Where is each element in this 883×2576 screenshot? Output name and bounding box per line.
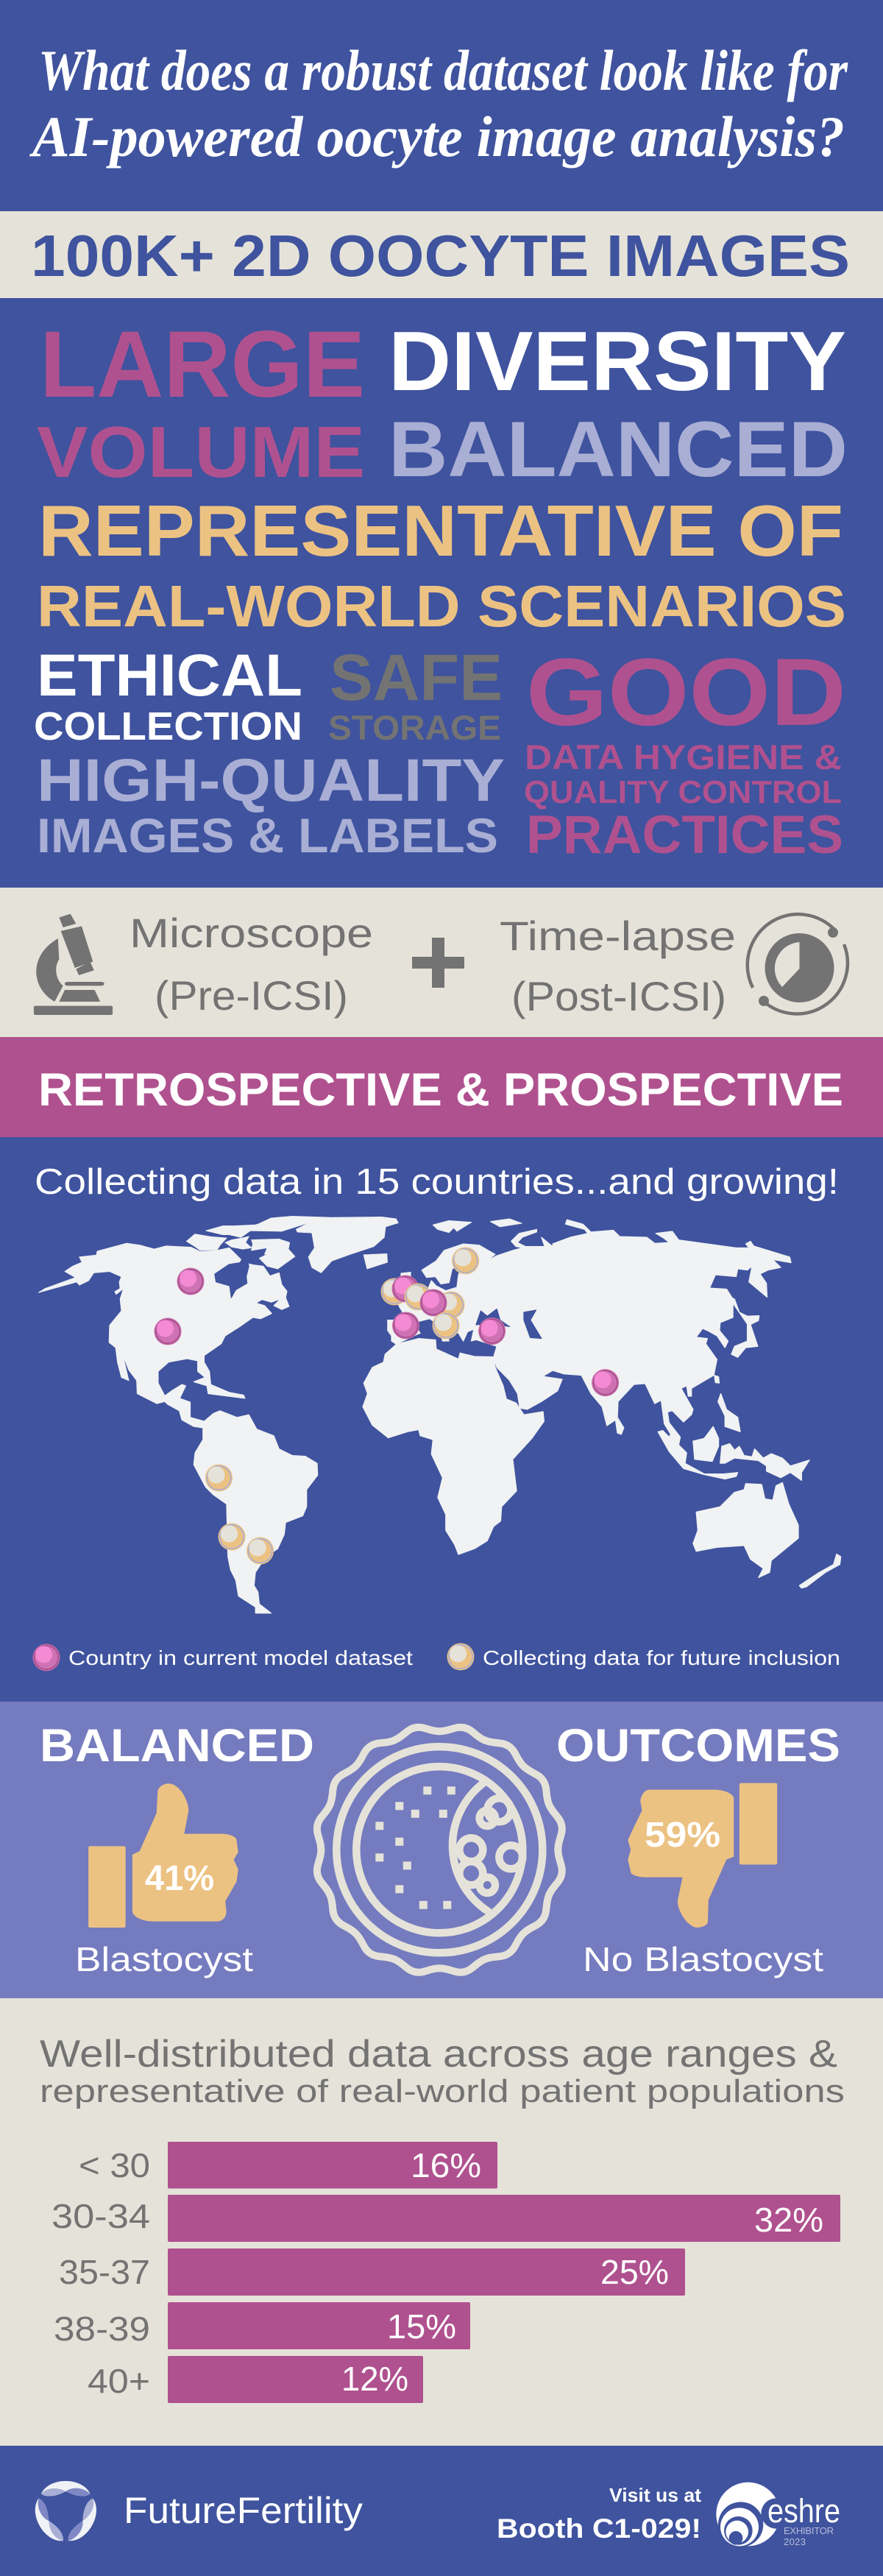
word: good data hygiene: PRACTICES [526,805,843,865]
word: good data hygiene: GOOD [526,638,846,746]
heading: balanced outcomes: OUTCOMES [556,1720,840,1772]
word: large volume [37,312,365,492]
legend: map: Country in current model dataset [68,1646,413,1669]
label: time-lapse: Time-lapse [500,913,736,959]
map: eurasia africa australia [363,1219,841,1588]
word: high quality: HIGH-QUALITY [37,747,505,814]
word: large volume: LARGE [40,312,365,417]
logo: eshre: eshre [767,2492,840,2530]
text: visit us [497,2484,701,2544]
word: ethical collection: ETHICAL [37,643,302,709]
bar: 38-39: 38-39 [54,2310,150,2348]
heading: age distribution: Well-distributed data across age ranges & [40,2033,837,2076]
icon: plus [412,938,464,988]
word: high quality: IMAGES & LABELS [37,808,498,863]
label: microscope: Microscope [130,910,373,956]
icon: thumbs up [88,1783,238,1928]
heading: age distribution: representative of real-world patient populations [40,2073,845,2109]
panel: image sources [34,910,848,1019]
footer [27,2481,840,2547]
bar: 38-39: 15% [387,2307,456,2346]
bar: under 30 [79,2142,497,2189]
logo: eshre: 2023 [784,2536,806,2547]
label: blastocyst: Blastocyst [75,1940,253,1978]
heading: balanced outcomes [40,1720,840,1772]
text: visit us: Visit us at [609,2484,701,2506]
legend: map [32,1643,840,1671]
label: microscope [130,910,373,1019]
word: balanced: BALANCED [389,405,848,493]
value: 59%: 59% [645,1816,720,1855]
map: americas [38,1216,398,1613]
word: good data hygiene: DATA HYGIENE & [525,737,842,776]
icon: oocyte [309,1719,570,1981]
bar: 40+ [88,2356,423,2403]
title: AI-powered oocyte image analysis? [29,105,845,169]
word: safe storage: SAFE [330,640,503,714]
word: large volume: VOLUME [37,411,365,492]
word: high quality [37,747,505,863]
label: time-lapse [500,913,736,1019]
word: safe storage [328,640,503,747]
heading: collecting data: Collecting data in 15 countries...and growing! [35,1162,839,1202]
bar: under 30: < 30 [79,2146,150,2184]
panel: balanced outcomes [40,1719,840,1981]
logo: eshre: EXHIBITOR [784,2525,834,2536]
heading: retrospective and prospective: RETROSPECTIVE & PROSPECTIVE [38,1064,843,1116]
word: representative: REAL-WORLD SCENARIOS [37,573,846,639]
word: good data hygiene: QUALITY CONTROL [524,774,842,810]
heading: age distribution [40,2033,845,2109]
bar: 38-39 [54,2302,470,2349]
bar: 30-34 [52,2195,840,2242]
bar: 30-34: 32% [754,2201,823,2239]
word: ethical collection: COLLECTION [34,704,302,749]
word: ethical collection [34,643,302,749]
icon: thumbs down [628,1783,777,1928]
logo: future fertility wordmark: FutureFertility [124,2490,363,2531]
word: safe storage: STORAGE [328,708,501,747]
map markers [155,1247,619,1565]
value: 41%: 41% [145,1859,214,1898]
chart: world map [38,1216,841,1613]
bar: 35-37: 35-37 [59,2253,150,2291]
logo: eshre [716,2483,840,2547]
bar: 30-34: 30-34 [52,2197,150,2235]
word: diversity: DIVERSITY [389,315,846,408]
bar: 35-37 [59,2248,685,2296]
legend: map: Collecting data for future inclusion [483,1646,840,1669]
heading: 100K+ images: 100K+ 2D OOCYTE IMAGES [31,223,850,289]
icon: microscope [34,914,113,1015]
word: representative: REPRESENTATIVE OF [38,490,843,571]
heading: balanced outcomes: BALANCED [40,1720,314,1772]
bar: 40+: 40+ [88,2362,150,2400]
label: no blastocyst: No Blastocyst [583,1940,823,1978]
label: time-lapse: (Post-ICSI) [511,973,726,1019]
chart: age range bars [52,2142,840,2403]
word: good data hygiene [524,638,846,865]
icon: time-lapse clock [748,914,848,1013]
bar: under 30: 16% [411,2146,481,2184]
label: microscope: (Pre-ICSI) [155,972,348,1019]
logo: future fertility mark [27,2481,104,2547]
bar: 35-37: 25% [600,2253,669,2291]
title [29,38,848,169]
panel: word cloud [34,312,848,865]
text: visit us: Booth C1-029! [497,2513,701,2544]
word: representative [37,490,846,639]
bar: 40+: 12% [341,2360,408,2398]
